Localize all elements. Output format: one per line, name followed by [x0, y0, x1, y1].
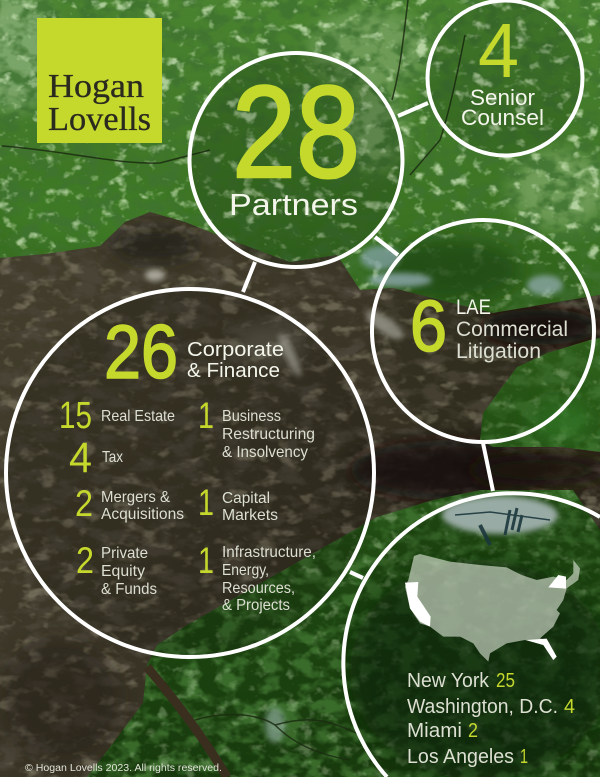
circle: partners: Partners: [229, 187, 358, 222]
item: infrastructure energy resources projects: Energy,: [222, 562, 269, 579]
item: business restructuring and insolvency: [198, 395, 315, 461]
office list: 4: [564, 696, 575, 718]
item: private equity and funds: Private: [101, 545, 148, 562]
item: private equity and funds: 2: [76, 540, 94, 581]
item: mergers and acquisitions: 2: [75, 483, 93, 524]
total: 26 corporate and finance: 26: [104, 310, 178, 395]
circle: LAE commercial litigation: LAE: [456, 296, 491, 319]
item: mergers and acquisitions: [75, 483, 184, 524]
item: infrastructure energy resources projects: Infrastructure,: [222, 544, 316, 561]
item: mergers and acquisitions: Mergers &: [101, 489, 170, 506]
total: 26 corporate and finance: [104, 310, 284, 395]
total: 26 corporate and finance: & Finance: [187, 359, 280, 382]
circle: LAE commercial litigation: [372, 220, 594, 442]
map: United States: [405, 554, 580, 662]
circle: senior counsel: Counsel: [461, 105, 544, 130]
item: infrastructure energy resources projects: & Projects: [222, 597, 290, 614]
office list: Miami: [407, 720, 462, 742]
item: capital markets: Markets: [222, 507, 278, 524]
logo: Hogan Lovells: Lovells: [48, 101, 151, 138]
circle: partners: 28: [232, 58, 360, 205]
item: mergers and acquisitions: Acquisitions: [101, 506, 184, 523]
item: private equity and funds: [76, 540, 157, 598]
office list: Washington, D.C.: [407, 696, 558, 718]
circle: senior counsel: [428, 0, 582, 156]
item: real estate: Real Estate: [101, 408, 175, 425]
item: infrastructure energy resources projects: 1: [198, 540, 214, 581]
copyright: © Hogan Lovells 2023. All rights reserved.: [25, 763, 222, 774]
office list: 1: [520, 746, 528, 768]
office list: New York: [407, 670, 490, 692]
item: tax: Tax: [102, 449, 123, 466]
circle: senior counsel: Senior: [470, 85, 535, 110]
item: business restructuring and insolvency: 1: [198, 395, 214, 436]
background: lower branch: [147, 667, 227, 777]
item: capital markets: [198, 482, 278, 524]
item: infrastructure energy resources projects: [198, 540, 316, 614]
item: infrastructure energy resources projects: Resources,: [222, 580, 295, 597]
background: sky leaves: [455, 508, 550, 545]
state: New York: [548, 575, 566, 589]
item: private equity and funds: & Funds: [101, 581, 157, 598]
circle: LAE commercial litigation: Commercial: [456, 318, 568, 341]
circle: partners: [190, 53, 402, 267]
office list: 2: [468, 720, 478, 742]
circle: LAE commercial litigation: Litigation: [456, 340, 541, 363]
logo: Hogan Lovells: Hogan: [48, 68, 144, 105]
circle: US offices: [343, 493, 600, 777]
item: capital markets: 1: [198, 482, 214, 523]
office list: Los Angeles: [407, 746, 514, 768]
state: Florida: [526, 639, 557, 660]
office list: [407, 670, 575, 768]
item: real estate: 15: [59, 395, 92, 437]
item: tax: 4: [69, 434, 92, 482]
item: business restructuring and insolvency: Restructuring: [222, 426, 315, 443]
circle: senior counsel: 4: [478, 8, 519, 94]
item: business restructuring and insolvency: Business: [222, 408, 281, 425]
circle: LAE commercial litigation: 6: [410, 287, 447, 367]
background: tree trunk: [0, 212, 600, 777]
circle: corporate and finance: [6, 289, 374, 657]
state: California: [405, 582, 431, 627]
item: business restructuring and insolvency: & Insolvency: [222, 444, 308, 461]
item: real estate: [59, 395, 175, 437]
logo: Hogan Lovells: [37, 18, 162, 143]
connectors between circles: [243, 103, 493, 578]
item: tax: [69, 434, 123, 482]
total: 26 corporate and finance: Corporate: [187, 338, 284, 361]
item: private equity and funds: Equity: [101, 563, 145, 580]
item: capital markets: Capital: [222, 490, 270, 507]
background: thin branches: [2, 0, 465, 760]
office list: 25: [496, 670, 515, 692]
